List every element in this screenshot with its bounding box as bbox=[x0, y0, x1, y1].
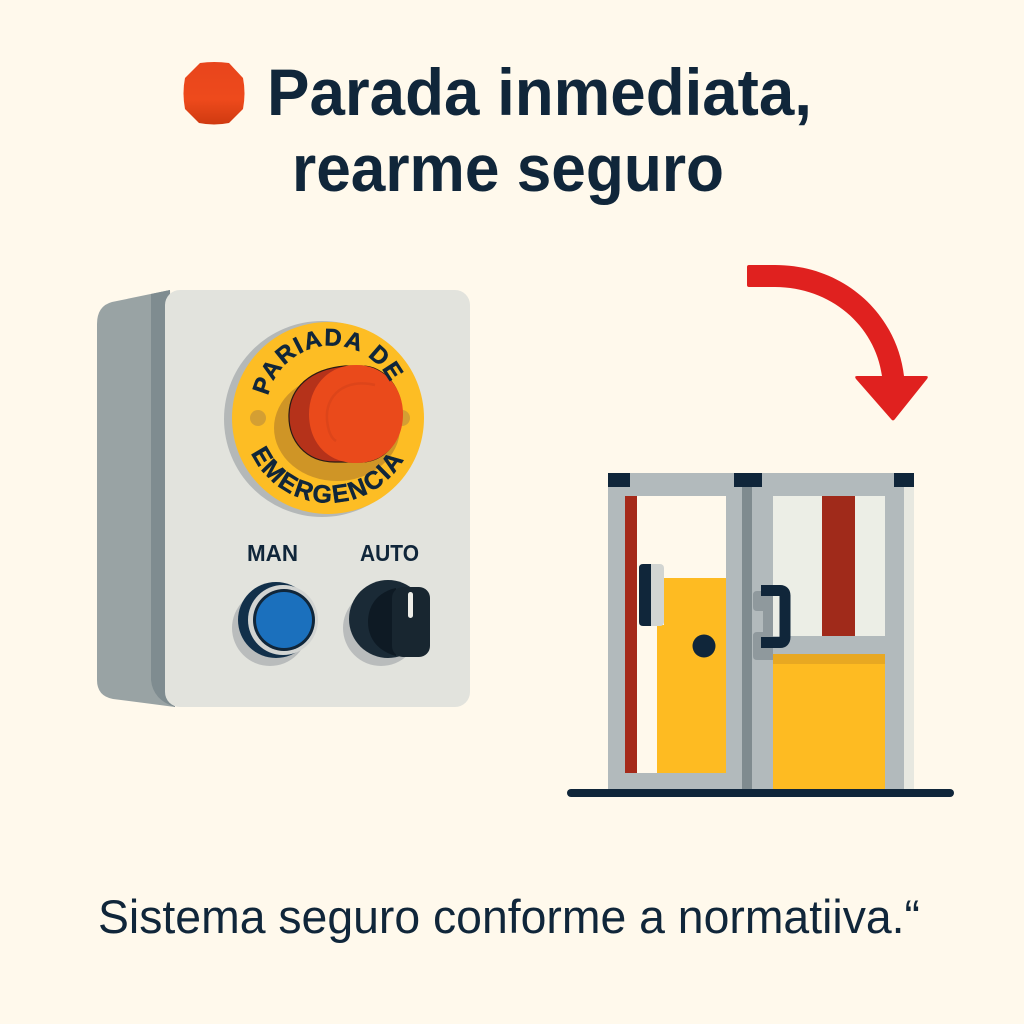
blue button bbox=[232, 582, 318, 666]
right yellow panel band bbox=[773, 654, 885, 664]
plate screw left bbox=[250, 410, 266, 426]
title with stop icon bbox=[184, 55, 812, 205]
right red strip bbox=[822, 496, 855, 636]
corner block centre bbox=[734, 473, 762, 487]
selector shadow bbox=[343, 590, 419, 666]
blue button ring bbox=[248, 585, 318, 655]
door frame bbox=[608, 473, 904, 790]
button plate shadow bbox=[224, 321, 420, 517]
title line 1: Parada inmediata, bbox=[267, 55, 812, 129]
blue button shadow bbox=[232, 590, 308, 666]
icon: stop octagon bbox=[184, 62, 244, 124]
control box side bbox=[97, 290, 175, 707]
selector handle bbox=[392, 587, 430, 657]
blue button ring inner bbox=[253, 589, 315, 651]
emergency stop button bbox=[224, 321, 424, 517]
door frame pale side bbox=[904, 487, 914, 790]
corner block left bbox=[608, 473, 630, 487]
button base bbox=[289, 366, 402, 462]
label: AUTO: AUTO bbox=[360, 540, 419, 566]
plate screw right bbox=[394, 410, 410, 426]
centre post bbox=[742, 487, 752, 790]
selector indicator bbox=[408, 592, 413, 618]
right yellow panel bbox=[773, 654, 885, 790]
left window glass bbox=[625, 496, 726, 773]
corner block right bbox=[894, 473, 914, 487]
rotary selector bbox=[343, 580, 430, 666]
latch dark side bbox=[639, 564, 651, 626]
title line 2: rearme seguro bbox=[292, 131, 724, 205]
lock hole bbox=[692, 634, 716, 658]
arrow: red curved bbox=[747, 265, 928, 420]
panel: control box bbox=[97, 290, 470, 707]
latch light side bbox=[645, 564, 664, 626]
cap highlight bbox=[327, 383, 375, 441]
control box side shade bbox=[151, 290, 175, 707]
left red strip bbox=[625, 496, 637, 773]
panel: safety door bbox=[567, 473, 954, 797]
control box front bbox=[165, 290, 470, 707]
label: PARIADA DE: PARIADA DE bbox=[252, 328, 404, 395]
yellow plate bbox=[232, 322, 424, 514]
blue button cap bbox=[256, 592, 312, 648]
right window bbox=[773, 496, 885, 790]
blue button base bbox=[238, 582, 314, 658]
label: EMERGENCIA: EMERGENCIA bbox=[251, 446, 404, 503]
latch bbox=[639, 564, 664, 626]
button shadow on plate bbox=[274, 375, 400, 481]
handle grip bbox=[761, 590, 785, 642]
selector inner bbox=[368, 588, 396, 656]
left yellow panel bbox=[657, 578, 726, 773]
left window bbox=[625, 496, 726, 773]
selector base bbox=[349, 580, 427, 658]
floor line bbox=[567, 789, 954, 797]
label: MAN: MAN bbox=[247, 540, 298, 566]
right window glass bbox=[773, 496, 885, 636]
footer caption: Sistema seguro conforme a normatiiva.“ bbox=[98, 890, 920, 943]
handle mount bbox=[753, 591, 773, 660]
button cap bbox=[309, 365, 403, 463]
door handle bbox=[753, 590, 785, 660]
